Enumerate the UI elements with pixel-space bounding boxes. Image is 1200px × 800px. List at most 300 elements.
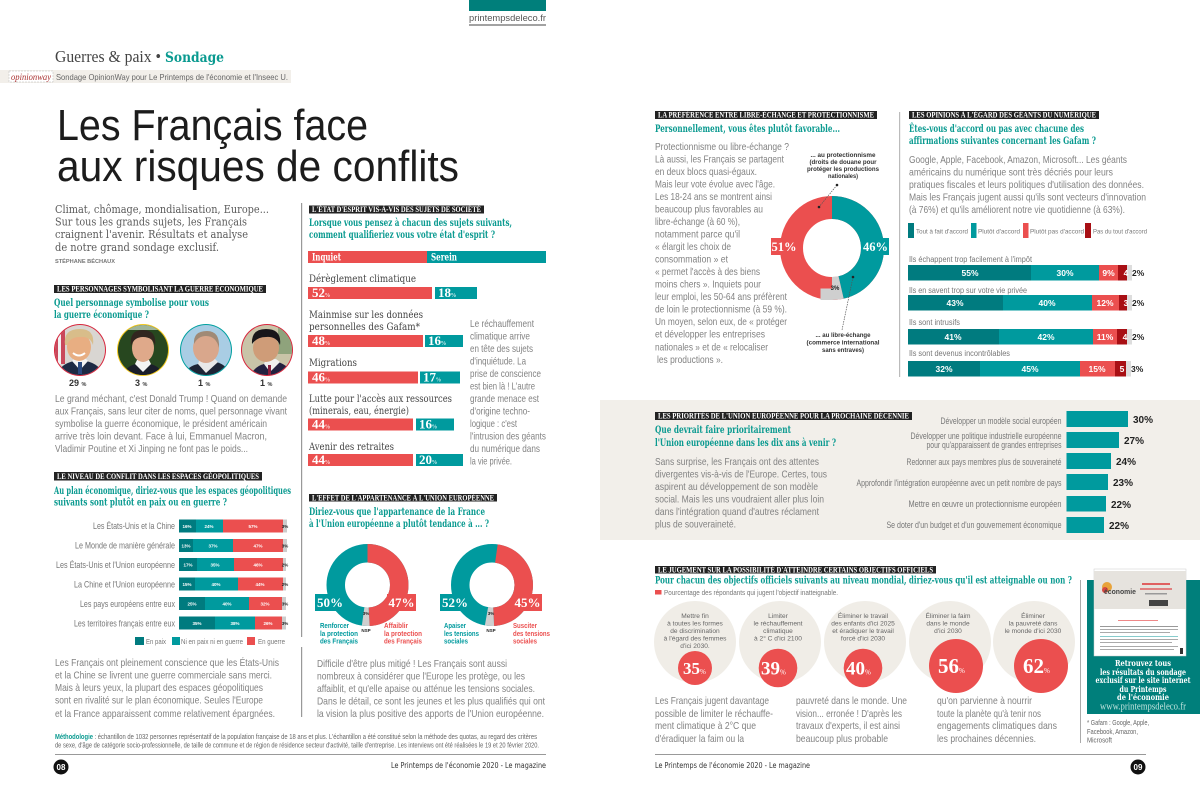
row: pays européens: 40% — [222, 602, 232, 606]
text block: protectionnisme: Un moyen, selon eux, de « protéger — [655, 316, 787, 328]
bar: incontrôlables: 45% — [1021, 364, 1039, 374]
row: Chine et UE: 44% — [255, 582, 265, 587]
row: États-Unis et UE: 17% — [183, 562, 193, 568]
bar: vie privée: 12% — [1096, 298, 1114, 308]
row: États-Unis et Chine: 3% — [282, 524, 288, 529]
URL: www.printempsdeleco.fr — [1100, 702, 1187, 712]
text block: Trump: aux Français, sans leur citer de noms, quel personnage vivant — [55, 406, 287, 418]
bar chart: priorités: Redonner aux pays membres plus de souveraineté — [906, 457, 1062, 468]
divider — [301, 203, 302, 637]
percentages: 29 % — [69, 378, 87, 388]
text block: protectionnisme: beaucoup plus favorables au — [655, 204, 763, 216]
text block: objectifs: possible de limiter le réchauffe- — [655, 708, 773, 720]
bar chart: priorités: Développer un modèle social européen — [940, 416, 1062, 427]
bubble: travail des enfants 40 %: forcé d'ici 2030 — [841, 636, 885, 642]
heading: priorités: LES PRIORITÉS DE L'UNION EUROPÉENNE POUR LA PROCHAINE DÉCENNIE — [658, 410, 909, 420]
bar: intrusifs: 41% — [944, 332, 962, 342]
text block: conflit: et la France apparaissent comme relativement épargnées. — [55, 708, 275, 720]
row: États-Unis et Chine: 16% — [182, 524, 192, 529]
title — [57, 101, 459, 191]
bar: vie privée — [908, 286, 1145, 310]
bar: vie privée: 3 — [1124, 298, 1129, 308]
question: préférence: Personnellement, vous êtes plutôt favorable... — [655, 124, 840, 135]
heading: objectifs: LE JUGEMENT SUR LA POSSIBILITÉ D'ATTEINDRE CERTAINS OBJECTIFS OFFICIELS — [658, 564, 933, 574]
bubble: pauvreté 62 %: le monde d'ici 2030 — [1005, 628, 1062, 635]
question: personnage: Quel personnage symbolise pour vous — [54, 298, 209, 309]
text block: objectifs: toute la planète qu'à tenir nos — [937, 708, 1041, 720]
text block: protectionnisme: nationales » et de « relocaliser — [655, 342, 768, 354]
question: conflit — [53, 486, 291, 508]
bubble: travail des enfants 40 % — [824, 601, 906, 687]
item: Migrations: 17% — [423, 370, 441, 384]
donut: protection: la protection — [320, 629, 358, 638]
bar: impôt — [908, 255, 1145, 280]
bar: incontrôlables: 5 — [1120, 364, 1125, 374]
donut: libre-échange — [771, 208, 889, 292]
bubble: climat 39 %: le réchauffement — [754, 620, 803, 628]
donut: tensions — [440, 553, 550, 646]
footnote: Gafam — [1087, 718, 1149, 744]
bar: intrusifs — [908, 318, 1145, 344]
callout: libre-échange: (commerce international — [806, 340, 880, 346]
bubble: climat 39 %: 39% — [761, 658, 786, 680]
item: Migrations: 46% — [312, 370, 330, 384]
donut: tensions: Apaiser — [444, 621, 466, 630]
row: Chine et UE: 40% — [211, 582, 221, 587]
OpinionWay source band: Sondage OpinionWay pour Le Printemps de l'économie et l'Inseec U. — [56, 72, 288, 82]
donut: libre-échange: 46% — [863, 240, 888, 254]
bar chart: priorités: Développer une politique industrielle européenne — [910, 431, 1062, 442]
donut: protection: NSP — [361, 628, 371, 633]
text block: réchauffement: en tête des sujets — [470, 343, 533, 355]
text block: conflit: et la Chine se livrent une guerre commerciale sans merci. — [55, 670, 272, 682]
title: aux risques de conflits — [57, 142, 459, 191]
item: Dérèglement climatique — [308, 273, 477, 300]
percentages: 3 % — [135, 378, 148, 388]
row: territoires français — [74, 616, 288, 630]
item: Gafam: Mainmise sur les données — [309, 309, 423, 321]
text block: Trump: symbolise la guerre économique, le président américain — [55, 418, 267, 430]
donut: protection: 3% — [363, 611, 369, 616]
divider right — [899, 112, 900, 377]
text block: objectifs: travaux d'experts, il est ainsi — [796, 720, 900, 732]
bar chart: priorités: Mettre en œuvre un protectionnisme européen — [908, 499, 1062, 510]
percentages: 1 % — [198, 378, 211, 388]
row: pays européens — [80, 597, 288, 610]
text block: réchauffement: Le réchauffement — [470, 318, 534, 330]
text block: objectifs: les prochaines décennies. — [937, 733, 1036, 745]
row: Monde: 37% — [208, 544, 218, 548]
text block: Gafam: Mais les Français jugent aussi qu'ils sont vecteurs d'innovation — [909, 192, 1146, 204]
callout: protectionnisme: protéger les productions — [807, 166, 879, 173]
bar: vie privée: 2% — [1132, 298, 1145, 308]
legend: Gafam: Pas du tout d'accord — [1093, 228, 1147, 236]
legend: conflit: En paix — [146, 637, 166, 646]
item: retraites — [308, 441, 463, 467]
item: Migrations: Migrations — [309, 357, 357, 369]
bar chart: priorités: 22% — [1111, 500, 1131, 511]
bar: impôt: 9% — [1102, 268, 1115, 278]
panel: appartenance à l'UE — [309, 492, 550, 720]
page number 08: 08 — [57, 763, 66, 772]
page number 09: 09 — [1134, 763, 1143, 772]
bar: impôt: 2% — [1132, 268, 1145, 278]
bar: vie privée: Ils en savent trop sur votre vie privée — [909, 286, 1027, 295]
bar: impôt: 55% — [961, 268, 979, 278]
item: retraites: Avenir des retraites — [308, 441, 394, 453]
bubble: pauvreté 62 %: la pauvreté dans — [1009, 620, 1058, 628]
text block: protectionnisme: les productions ». — [657, 354, 723, 366]
website screenshot — [1094, 569, 1186, 656]
bubble: faim 56 %: dans le monde — [926, 620, 970, 628]
donut: protection: 47% — [388, 595, 414, 610]
text block: mitigé: la vision la plus positive des apports de l'Union européenne. — [317, 708, 544, 720]
donut: tensions: NSP — [486, 628, 496, 633]
bubble: femmes 35 %: à l'égard des femmes — [664, 636, 727, 642]
row: États-Unis et Chine — [93, 520, 288, 532]
callout: protectionnisme: nationales) — [828, 173, 858, 180]
row: Monde: 13% — [181, 544, 191, 548]
question: Gafam — [909, 123, 1096, 147]
panel: niveau de conflit — [53, 471, 291, 720]
item: ressources: Lutte pour l'accès aux ressources — [309, 393, 452, 405]
bubble: faim 56 %: 56% — [938, 654, 965, 678]
text block: Gafam: (à 76%) et qu'ils améliorent notre vie quotidienne (à 63%). — [909, 204, 1125, 216]
question: priorités — [655, 425, 836, 449]
row: pays européens: Les pays européens entre eux — [80, 599, 175, 610]
bubble: femmes 35 % — [654, 601, 736, 685]
question: conflit: suivants sont plutôt en paix ou en guerre ? — [54, 498, 227, 508]
row: États-Unis et UE: Les États-Unis et l'Union européenne — [56, 560, 175, 571]
bubble: climat 39 %: climatique — [763, 628, 793, 635]
donut: tensions: 3% — [488, 611, 494, 616]
author: STÉPHANE BÉCHAUX — [55, 257, 115, 265]
portrait: Vladimir Poutine 1 % — [180, 324, 232, 376]
question: personnage: la guerre économique ? — [54, 310, 149, 321]
row: États-Unis et Chine: 24% — [204, 524, 214, 529]
bar chart: priorités: pour qu'apparaissent de grandes entreprises — [926, 440, 1062, 451]
panel: call to action — [1087, 569, 1200, 714]
CTA text: de l'économie — [1117, 692, 1169, 703]
bubble: pauvreté 62 %: 62% — [1023, 654, 1050, 678]
donut: tensions: 45% — [514, 595, 540, 610]
heading: état d'esprit: L'ÉTAT D'ESPRIT VIS-À-VIS DES SUJETS DE SOCIÉTÉ — [312, 204, 481, 214]
text block: protectionnisme: Là aussi, les Français se partagent — [655, 154, 784, 166]
panel: objectifs officiels — [654, 564, 1075, 745]
section kicker — [55, 47, 224, 66]
bar chart: priorités: Se doter d'un budget et d'un gouvernement économique — [886, 520, 1062, 531]
text block: mitigé: Dans le détail, ce sont les jeunes et les plus qualifiés qui ont — [317, 696, 545, 708]
text block: priorités: divergentes vis-à-vis de l'Europe. Certes, tous — [655, 468, 827, 480]
bar: vie privée: 40% — [1038, 298, 1056, 308]
legend: Gafam: Plutôt pas d'accord — [1030, 228, 1084, 236]
bubble: faim 56 %: d'ici 2030 — [934, 628, 962, 635]
OpinionWay source band — [0, 70, 291, 83]
row: territoires français: 3% — [282, 621, 288, 626]
row: territoires français: 35% — [192, 621, 202, 626]
row: États-Unis et Chine: Les États-Unis et la Chine — [93, 521, 175, 532]
bubble: femmes 35 %: de discrimination — [670, 628, 720, 635]
divider sidebar — [1080, 580, 1081, 743]
row: pays européens: 25% — [187, 602, 197, 606]
text block: Gafam — [909, 154, 1146, 216]
donut: protection: Affaiblir — [384, 621, 408, 630]
bar: incontrôlables: 32% — [935, 364, 953, 374]
item: ressources: 44% — [312, 416, 330, 432]
item: Dérèglement climatique: 52% — [312, 285, 330, 300]
bar: impôt: 4 — [1124, 268, 1129, 278]
website screenshot: économie — [1104, 589, 1136, 596]
heading: conflit: LE NIVEAU DE CONFLIT DANS LES ESPACES GÉOPOLITIQUES — [57, 471, 259, 481]
bar chart: priorités: Approfondir l'intégration européenne avec un petit nombre de pays — [856, 478, 1062, 489]
text block: protectionnisme: libre-échange (à 60 %), — [655, 216, 740, 228]
donut: tensions: sociales — [513, 636, 537, 646]
question: état d'esprit: comment qualifieriez vous votre état d'esprit ? — [309, 230, 495, 241]
bubble: femmes 35 %: à toutes les formes — [667, 620, 724, 628]
bar chart: priorités: 23% — [1113, 478, 1133, 489]
text block: protectionnisme: et développer les entreprises — [655, 328, 765, 340]
intro text: Climat, chômage, mondialisation, Europe... — [55, 202, 269, 216]
text block: objectifs: ment climatique à 2°C que — [655, 720, 756, 732]
text block: réchauffement: prise de conscience — [470, 368, 541, 380]
text block: conflit — [55, 656, 279, 720]
text block: objectifs — [655, 695, 1057, 745]
percentages: 1 % — [260, 378, 273, 388]
item: retraites: 20% — [419, 452, 437, 467]
row: États-Unis et UE: 2% — [282, 562, 288, 568]
text block: réchauffement: climatique arrive — [470, 330, 530, 342]
text block: objectifs: qu'on parvienne à nourrir — [937, 695, 1032, 707]
text block: objectifs: beaucoup plus probable — [796, 733, 888, 745]
legend: conflit — [135, 637, 285, 646]
text block: priorités: dans l'intégration quand d'autres réclament — [655, 506, 819, 518]
legend bar: Inquiet / Serein: Serein — [431, 252, 457, 264]
legend: Gafam: Tout à fait d'accord — [916, 228, 968, 236]
donut: tensions: sociales — [444, 636, 468, 646]
question: priorités: Que devrait faire prioritairement — [655, 425, 791, 436]
intro text: craignent l'avenir. Résultats et analyse — [55, 227, 248, 241]
row: États-Unis et UE — [56, 558, 288, 571]
row: territoires français: Les territoires français entre eux — [74, 618, 175, 630]
text block: conflit: Mais à leurs yeux, la plupart des espaces géopolitiques — [55, 682, 263, 694]
question: appartenance: à l'Union européenne a plutôt tendance à ... ? — [309, 519, 489, 530]
methodology note — [55, 734, 539, 750]
text block: objectifs: Les Français jugent davantage — [655, 695, 769, 707]
text block: conflit: Les Français ont pleinement conscience que les États-Unis — [55, 656, 279, 669]
text block: mitigé: Difficile d'être plus mitigé ! Les Français sont aussi — [317, 658, 507, 670]
stacked bar chart: conflit — [56, 520, 288, 630]
text block: Gafam: américains du numérique sont très décriés pour leurs — [909, 166, 1113, 178]
legend bar: Inquiet / Serein — [308, 251, 546, 264]
row: Monde: Le Monde de manière générale — [75, 540, 175, 552]
question: conflit: Au plan économique, diriez-vous que les espaces géopolitiques — [53, 486, 291, 497]
heading: appartenance: L'EFFET DE L'APPARTENANCE À L'UNION EUROPÉENNE — [312, 492, 494, 502]
bar: incontrôlables: 15% — [1088, 364, 1106, 374]
row: Chine et UE — [74, 578, 288, 590]
donut: protection: des Français — [320, 636, 358, 646]
row: Chine et UE: 2% — [282, 582, 288, 587]
text block: protectionnisme: en deux blocs quasi-égaux. — [655, 166, 757, 178]
callout: libre-échange — [806, 276, 880, 354]
legend: conflit: En guerre — [258, 637, 285, 646]
text block: protectionnisme: « élargit les choix de — [655, 241, 731, 253]
bubble: pauvreté 62 % — [993, 601, 1075, 693]
text block: priorités: social. Mais les uns voudraient aller plus loin — [655, 494, 824, 506]
text block: réchauffement: du numérique dans — [470, 443, 540, 455]
item: Gafam: 48% — [312, 333, 330, 348]
text block: réchauffement: l'intrusion des géants — [470, 430, 546, 442]
question: personnage — [54, 298, 209, 321]
footnote: Gafam: * Gafam : Google, Apple, — [1087, 718, 1149, 727]
portrait: Emmanuel Macron 3 % — [117, 324, 169, 376]
item: Gafam: personnelles des Gafam* — [309, 321, 421, 333]
bubble: femmes 35 %: 35% — [683, 659, 706, 678]
text block: mitigé: affaiblit, et qu'elle apaise ou atténue les tensions sociales. — [317, 683, 535, 695]
callout: protectionnisme — [807, 152, 879, 208]
bar: intrusifs: 2% — [1132, 332, 1145, 342]
donut: protection: des Français — [384, 636, 422, 646]
donut: tensions: 52% — [442, 595, 468, 610]
question: Gafam: Êtes-vous d'accord ou pas avec chacune des — [909, 123, 1084, 135]
text block: protectionnisme: de loin le protectionnisme (à 59 %). — [655, 304, 787, 316]
text block: Trump: arrive très loin devant. Face à lui, Emmanuel Macron, — [55, 430, 267, 442]
OpinionWay source band: opinionway — [11, 72, 51, 82]
bubble: travail des enfants 40 %: Éliminer le travail — [838, 611, 889, 620]
donut: protection: 50% — [317, 595, 343, 610]
row: territoires français: 26% — [263, 621, 273, 626]
row: Monde: 47% — [253, 544, 263, 548]
callout: protectionnisme: ... au protectionnisme — [810, 152, 876, 159]
panel: personnages — [54, 284, 293, 455]
question: priorités: l'Union européenne dans les dix ans à venir ? — [655, 438, 836, 449]
donut: tensions: Susciter — [513, 621, 537, 630]
text block: réchauffement: grande menace est — [470, 393, 539, 405]
bar chart: priorités: 27% — [1124, 436, 1144, 447]
site tab: printempsdeleco.fr — [469, 0, 546, 26]
section kicker: Guerres & paix • — [55, 47, 161, 66]
CTA text: du Printemps — [1120, 685, 1167, 695]
text block: objectifs: engagements climatiques dans — [937, 720, 1057, 732]
site tab: printempsdeleco.fr: printempsdeleco.fr — [469, 13, 546, 24]
text block: protectionnisme: Mais leur vote évolue avec l'âge. — [655, 178, 775, 190]
text block: protectionnisme: leur emploi, les 50-64 ans préfèrent — [655, 291, 787, 303]
bubble: femmes 35 %: Mettre fin — [681, 613, 709, 620]
bar: intrusifs: 4 — [1123, 332, 1128, 342]
text block: protectionnisme: Les 18-24 ans se montrent ainsi — [655, 191, 772, 203]
item: retraites: 44% — [312, 452, 330, 467]
row: pays européens: 3% — [282, 602, 288, 606]
intro text: Sur tous les grands sujets, les Français — [55, 214, 247, 228]
portrait: Xi Jinping 1 % — [241, 324, 293, 376]
bubble: climat 39 %: à 2° C d'ici 2100 — [754, 634, 802, 642]
text block: réchauffement: est bien là ! L'autre — [470, 380, 535, 392]
text block: Gafam: pratiques fiscales et leurs politiques d'utilisation des données. — [909, 179, 1144, 191]
footnote: Gafam: Facebook, Amazon, — [1087, 727, 1138, 736]
legend bar: Inquiet / Serein: Inquiet — [312, 252, 341, 264]
question: état d'esprit: Lorsque vous pensez à chacun des sujets suivants, — [309, 218, 512, 229]
bubble: travail des enfants 40 %: et éradiquer le travail — [832, 628, 894, 635]
bubble: faim 56 %: Éliminer la faim — [925, 611, 971, 620]
text block: protectionnisme: consommation » et — [655, 254, 728, 266]
row: territoires français: 38% — [230, 621, 240, 626]
item: Gafam: 16% — [428, 333, 446, 348]
text block: protectionnisme — [655, 141, 789, 366]
callout: libre-échange: ... au libre-échange — [816, 332, 871, 339]
callout: libre-échange: sans entraves) — [822, 347, 864, 354]
donut: protection — [315, 553, 422, 646]
text block: Trump: Vladimir Poutine et Xi Jinping ne font pas le poids... — [55, 443, 248, 455]
intro text: de notre grand sondage exclusif. — [55, 240, 219, 254]
bar: incontrôlables — [908, 349, 1144, 376]
row: États-Unis et Chine: 57% — [248, 524, 258, 529]
callout: protectionnisme: (droits de douane pour — [810, 159, 877, 166]
row: Monde: 3% — [282, 544, 288, 548]
bubble: femmes 35 %: d'ici 2030. — [680, 643, 710, 650]
text block: protectionnisme: Protectionnisme ou libre-échange ? — [655, 141, 789, 153]
text block: Gafam: Google, Apple, Facebook, Amazon, Microsoft... Les géants — [909, 154, 1127, 166]
question: appartenance: Diriez-vous que l'appartenance de la France — [309, 507, 485, 518]
bubble: travail des enfants 40 %: 40% — [846, 658, 871, 680]
text block: Trump: Le grand méchant, c'est Donald Trump ! Quand on demande — [55, 393, 287, 405]
bar: impôt: 30% — [1056, 268, 1074, 278]
heading: Gafam: LES OPINIONS À L'ÉGARD DES GÉANTS DU NUMÉRIQUE — [912, 110, 1096, 120]
text block: réchauffement: d'origine techno- — [470, 406, 530, 418]
item: Dérèglement climatique: Dérèglement climatique — [309, 273, 416, 285]
methodology note: de sexe, d'âge de catégorie socio-professionnelle, de taille de commune et de région de résidence secteur d'activité, taille d'entreprise. Les interviews ont été réalisées le 19 et 20 février 2020. — [55, 742, 539, 750]
heading: personnages: LES PERSONNAGES SYMBOLISANT LA GUERRE ÉCONOMIQUE — [57, 284, 263, 294]
footer left: Le Printemps de l'économie 2020 - Le magazine — [391, 760, 546, 770]
text block: protectionnisme: notamment parce qu'il — [655, 228, 740, 240]
question: Gafam: affirmations suivantes concernant les Gafam ? — [909, 136, 1096, 147]
portrait: Donald Trump 29 % — [54, 324, 106, 376]
bar: vie privée: 43% — [946, 298, 964, 308]
row: Chine et UE: La Chine et l'Union européenne — [74, 580, 175, 590]
footnote: Gafam: Microsoft — [1087, 736, 1113, 744]
bar: intrusifs: Ils sont intrusifs — [909, 318, 960, 327]
panel: état d'esprit — [308, 204, 546, 468]
page number 08 — [54, 760, 68, 774]
item: ressources: 16% — [419, 416, 437, 432]
bar chart: priorités: 30% — [1133, 415, 1153, 426]
bar: incontrôlables: 3% — [1131, 364, 1144, 374]
question: appartenance — [309, 507, 489, 530]
panel: libre-échange vs protectionnisme — [655, 110, 889, 366]
item: Dérèglement climatique: 18% — [438, 285, 456, 300]
methodology note: Méthodologie : échantillon de 1032 personnes représentatif de la population française de 18 ans et plus. L'échantillon a été constitué selon la méthode des quotas, au regard des critères — [55, 734, 537, 741]
text block: réchauffement: la vie privée. — [470, 456, 512, 468]
text block: Trump — [55, 393, 287, 455]
bar chart: priorités — [856, 411, 1153, 533]
question: état d'esprit — [309, 218, 512, 241]
text block: réchauffement: logique : c'est — [470, 418, 517, 430]
text block: priorités: plus de souveraineté. — [655, 518, 736, 530]
donut: protection: la protection — [384, 629, 422, 638]
text block: priorités: aspirent au développement de son modèle — [655, 481, 818, 493]
bubble: pauvreté 62 %: Éliminer — [1021, 611, 1046, 620]
bar chart: priorités: 24% — [1116, 457, 1136, 468]
item: ressources — [308, 393, 454, 432]
text block: protectionnisme: « permet l'accès à des biens — [655, 266, 760, 278]
text block: réchauffement: d'inquiétude. La — [470, 356, 526, 368]
donut: tensions: les tensions — [444, 629, 479, 638]
CTA text — [1096, 659, 1191, 703]
bar: impôt: Ils échappent trop facilement à l'impôt — [909, 255, 1033, 264]
text block: priorités — [655, 456, 827, 530]
item: Gafam — [308, 309, 463, 348]
item: ressources: (minerais, eau, énergie) — [309, 405, 409, 417]
bar chart: priorités: 22% — [1109, 521, 1129, 532]
item: Migrations — [308, 357, 460, 384]
